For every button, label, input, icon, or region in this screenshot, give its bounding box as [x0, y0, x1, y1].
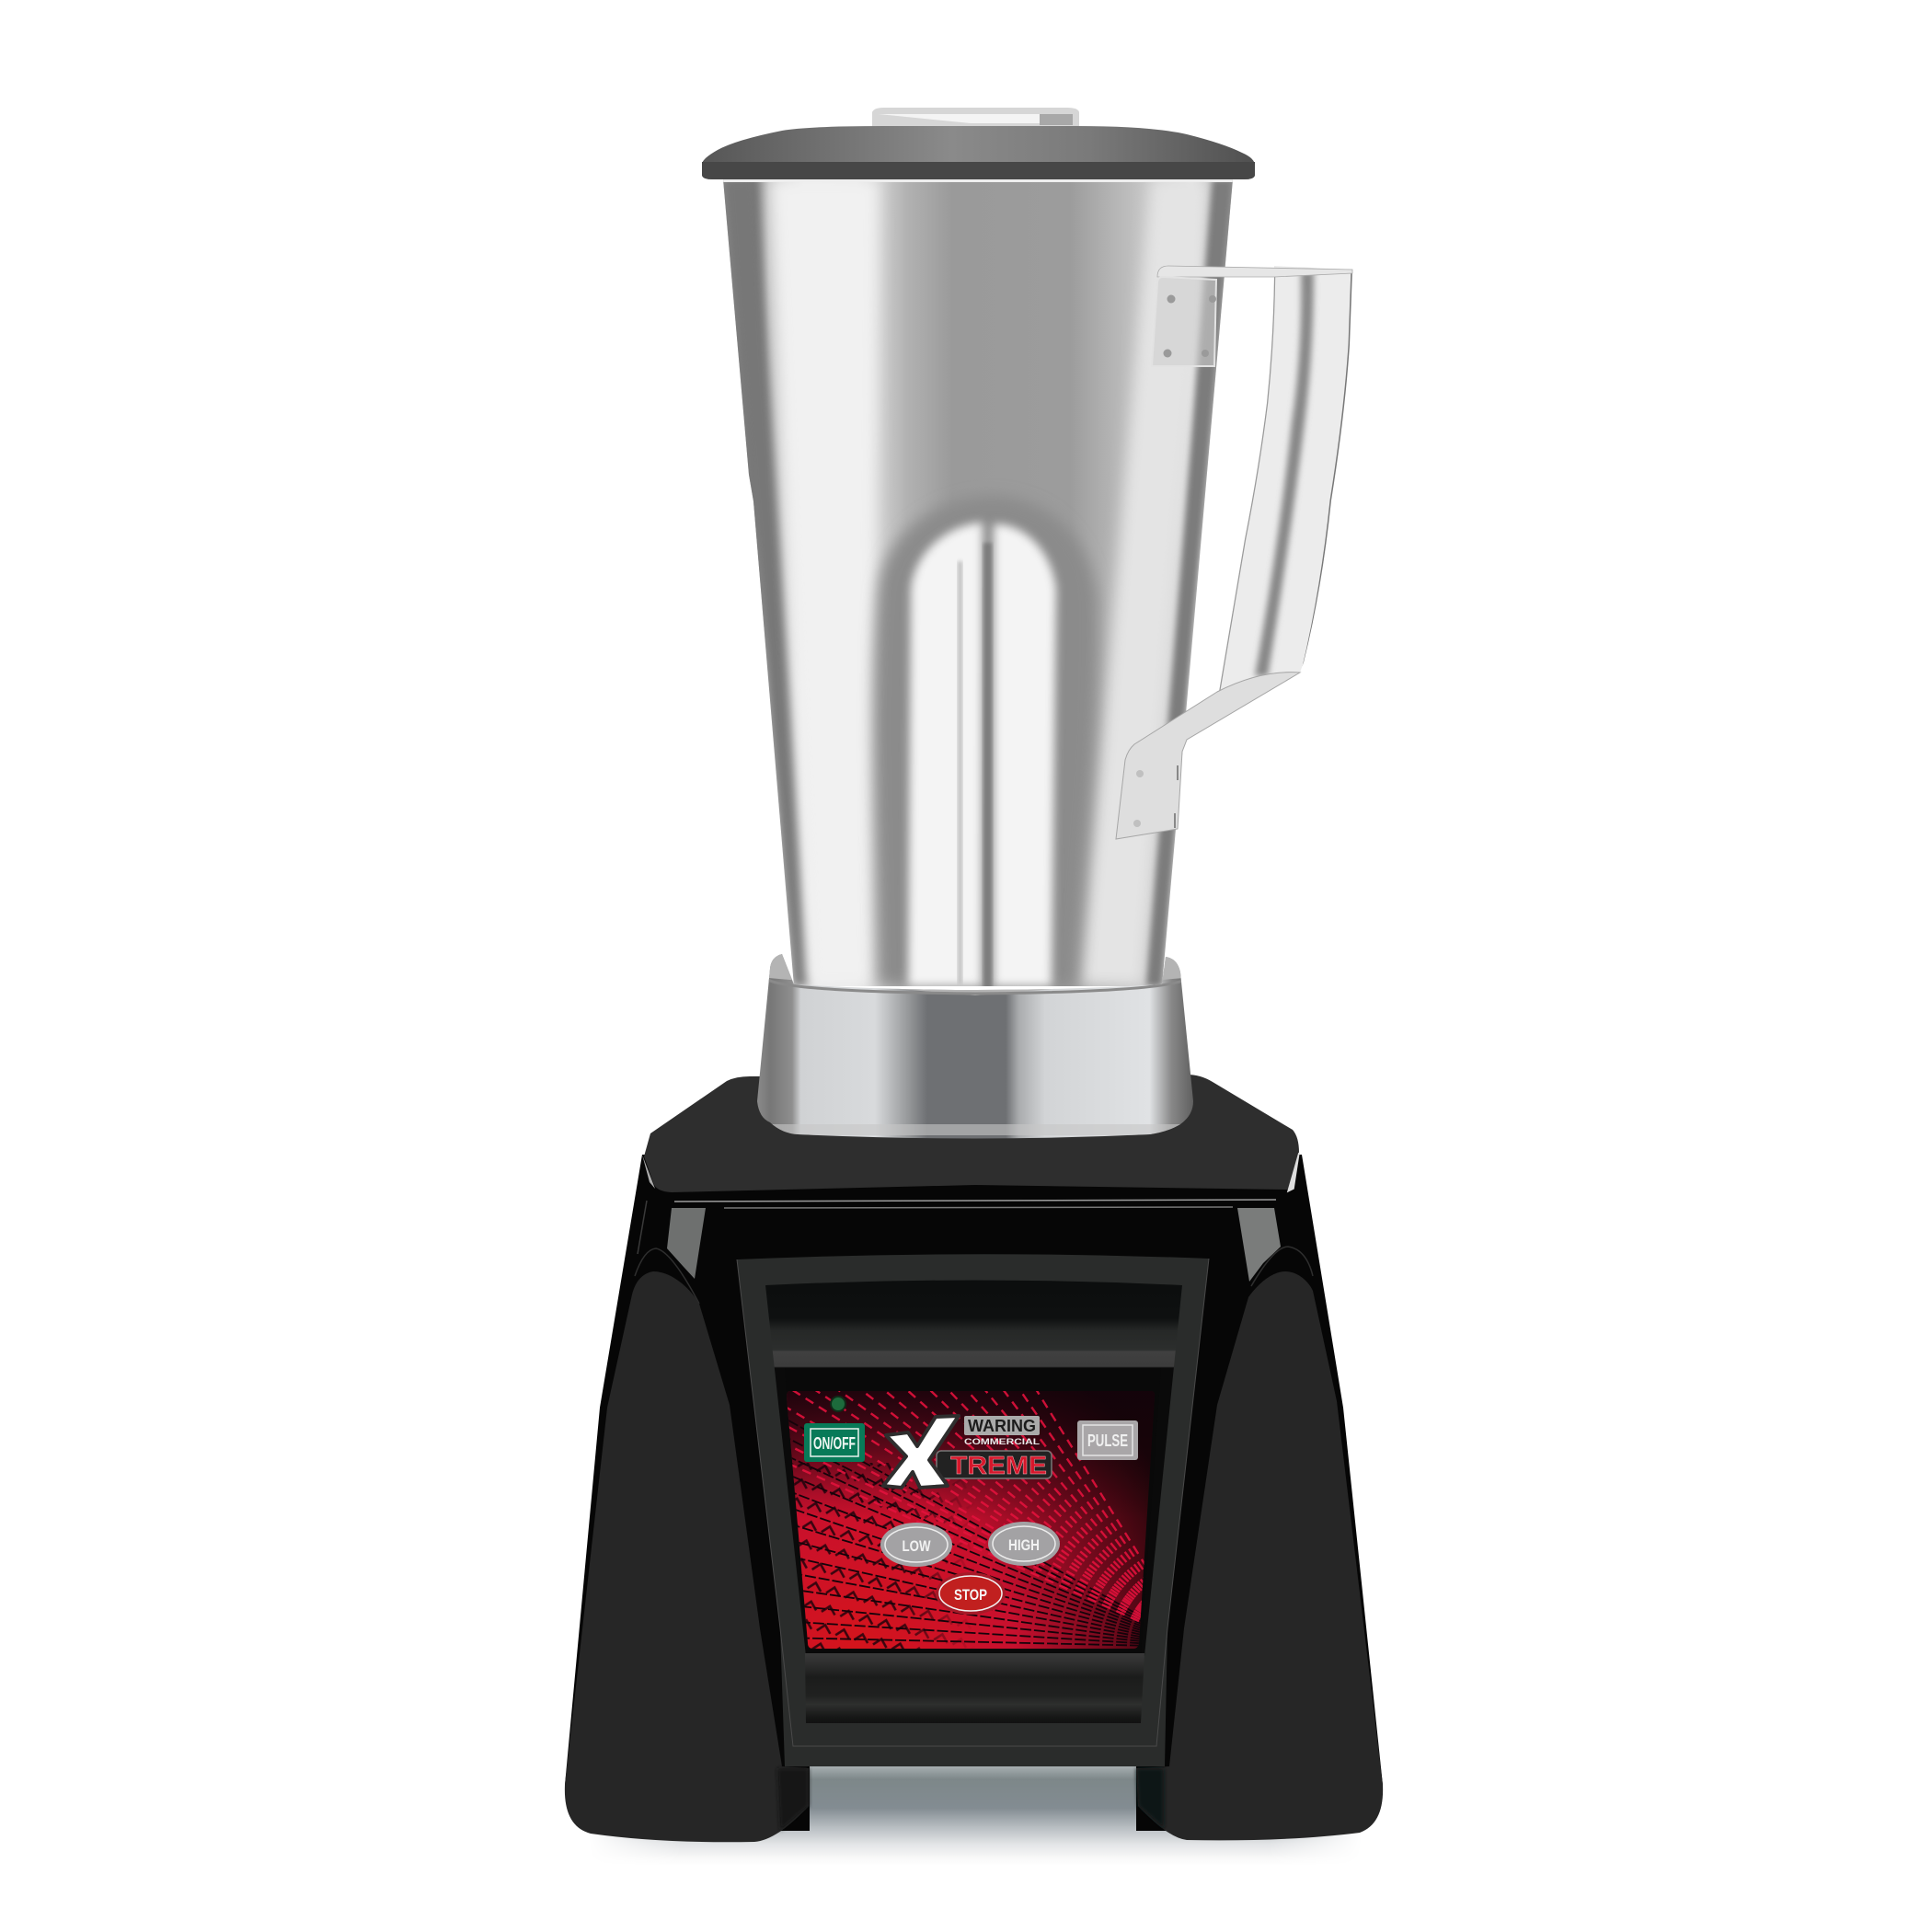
high button — [988, 1522, 1060, 1566]
on/off button: ON/OFF — [813, 1434, 856, 1453]
low button: LOW — [902, 1537, 931, 1555]
pulse button — [1077, 1420, 1138, 1460]
fan lines dark — [788, 1420, 1141, 1647]
treme wordmark: TREME — [950, 1451, 1047, 1479]
stop button — [936, 1572, 1006, 1615]
handle lower strap — [1116, 673, 1300, 839]
commercial wordmark: COMMERCIAL — [964, 1437, 1040, 1447]
pulse button: PULSE — [1087, 1432, 1128, 1450]
blender illustration — [565, 108, 1383, 1866]
rubber lid — [702, 126, 1255, 179]
motor base body — [565, 1155, 1383, 1831]
high button: HIGH — [1008, 1536, 1040, 1554]
front control housing — [737, 1254, 1209, 1766]
stainless steel jar — [718, 179, 1242, 994]
waring wordmark: WARING — [968, 1417, 1036, 1435]
on/off button — [804, 1423, 865, 1462]
gloss highlights — [635, 1200, 1313, 1304]
power indicator light — [831, 1397, 845, 1411]
left rubber foot — [565, 1271, 809, 1842]
top plate of base — [642, 1075, 1299, 1192]
right rubber foot — [1136, 1271, 1383, 1840]
lid knob — [872, 108, 1079, 127]
stop button: STOP — [954, 1586, 987, 1604]
low button — [880, 1523, 952, 1567]
handle grip — [1219, 266, 1352, 692]
red control panel — [787, 1391, 1155, 1649]
X mark — [883, 1416, 959, 1488]
fan lines red — [788, 1391, 1144, 1623]
upper mounting plate — [1152, 277, 1216, 366]
metal collar — [754, 954, 1196, 1139]
floor shadow — [604, 1766, 1347, 1857]
lower rivets — [1133, 765, 1179, 828]
handle — [1116, 266, 1352, 839]
xtreme logo — [883, 1416, 1052, 1488]
handle top bar — [1157, 266, 1352, 277]
